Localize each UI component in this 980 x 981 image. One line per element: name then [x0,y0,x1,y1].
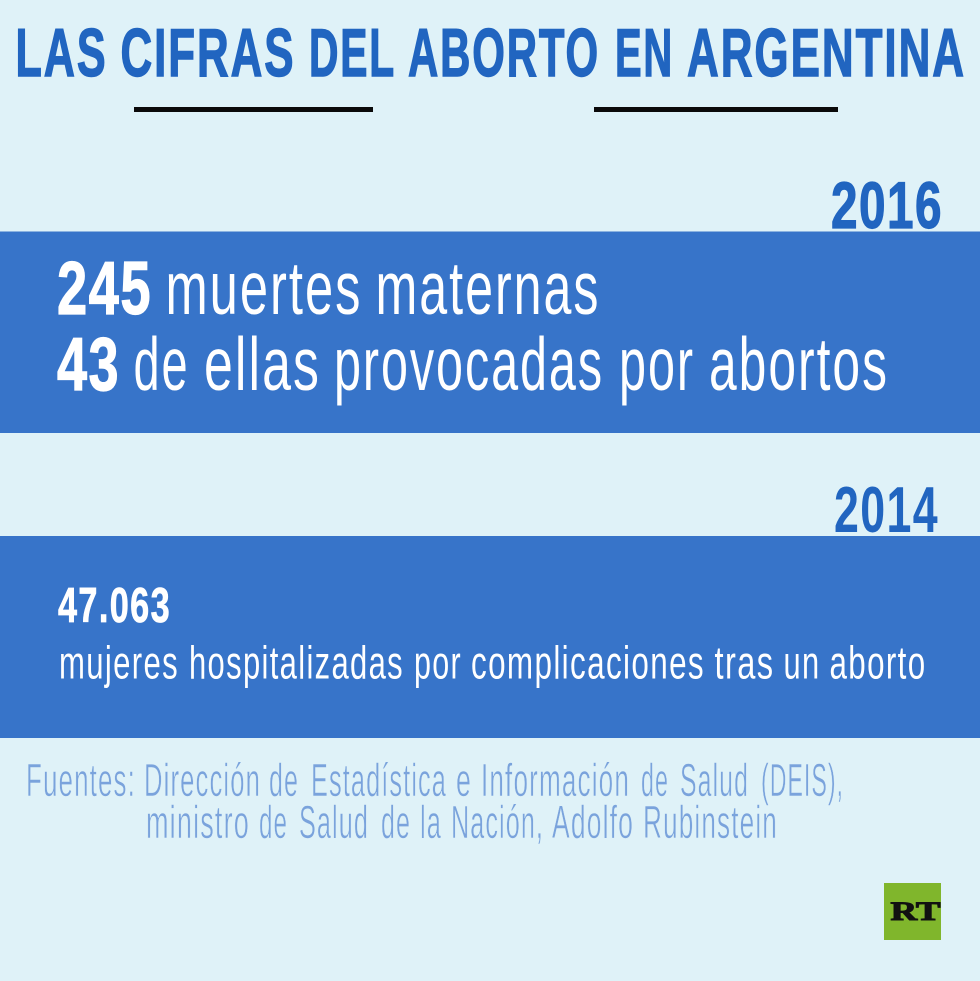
sources: e [456,754,472,806]
sources: Salud [680,754,749,806]
sources: Salud [299,796,369,848]
hospitalized description: hospitalizadas [189,636,404,688]
hospitalized description: por [414,636,462,688]
maternal deaths line [57,246,600,330]
sources: Nación, [451,796,544,848]
panel: 2016 figures [0,232,980,433]
sources: Estadística [311,754,447,806]
title: CIFRAS [120,15,296,91]
hospitalized description: aborto [830,636,926,688]
sources: (DEIS), [761,754,844,806]
sources: Dirección [144,754,261,806]
sources: de [269,754,299,806]
sources: de [259,796,288,848]
sources [26,754,844,848]
sources: Adolfo [552,796,634,848]
panel: 2014 figures [0,536,980,738]
title underline right [594,107,838,112]
icon: RT logo [884,883,941,940]
title: LAS [16,15,108,91]
title: DEL [309,15,396,91]
abortion deaths line: ellas [204,322,321,406]
title: EN [615,15,674,91]
hospitalized number: 47.063 [58,579,171,633]
maternal deaths line: muertes [166,246,362,330]
abortion deaths line: 43 [57,322,120,406]
maternal deaths line: maternas [376,246,600,330]
hospitalized description: un [784,636,820,688]
abortion deaths line [57,322,889,406]
abortion deaths line: por [619,322,695,406]
sources: ministro [146,796,250,848]
sources: Rubinstein [643,796,778,848]
sources: la [420,796,442,848]
hospitalized description: mujeres [59,636,179,688]
hospitalized description: tras [714,636,774,688]
title: ABORTO [408,15,600,91]
sources: Información [481,754,630,806]
sources: Fuentes: [26,754,136,806]
hospitalized description [59,636,926,688]
title [16,15,966,91]
abortion deaths line: provocadas [334,322,604,406]
icon: RT logo: RT [890,897,940,926]
sources: de [641,754,669,806]
maternal deaths line: 245 [57,246,152,330]
hospitalized description: complicaciones [471,636,705,688]
title underline left [134,107,373,112]
abortion deaths line: abortos [709,322,889,406]
abortion deaths line: de [134,322,190,406]
sources: de [381,796,411,848]
